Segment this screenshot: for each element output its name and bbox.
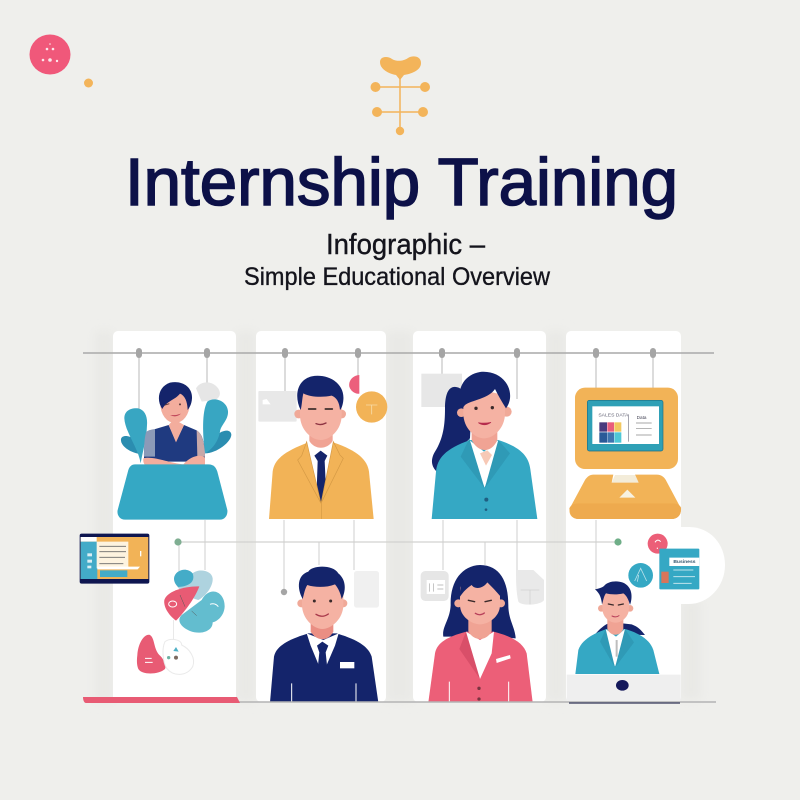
panel: side bubble	[681, 527, 725, 604]
middle hanging rail	[174, 520, 622, 595]
person 6: man in teal jacket at laptop	[567, 534, 699, 702]
monitor screen	[587, 400, 663, 451]
head	[598, 605, 605, 612]
laptop card	[258, 391, 297, 422]
head	[454, 599, 462, 607]
shirt	[469, 440, 498, 488]
tie	[314, 451, 327, 503]
info card: Business	[673, 559, 696, 565]
person 4: man in navy suit	[270, 567, 379, 702]
neck	[472, 428, 497, 450]
laptop base	[567, 675, 681, 702]
pink half circle	[349, 375, 359, 394]
icon: orange branching tree	[370, 56, 430, 135]
head	[160, 384, 190, 423]
note card left	[421, 571, 449, 601]
neck	[607, 618, 623, 635]
panel: column 3	[413, 331, 546, 702]
neck	[311, 620, 333, 639]
note card right	[516, 570, 544, 605]
shirt	[466, 632, 494, 679]
lapels	[298, 442, 321, 503]
panel: column 2	[256, 331, 386, 702]
jacket	[428, 632, 533, 702]
info card	[659, 549, 699, 589]
blob cluster upper	[164, 570, 225, 633]
title: Internship Training	[125, 145, 678, 220]
note card behind person 1	[196, 382, 220, 402]
grey card	[421, 374, 462, 407]
arms	[143, 456, 205, 469]
pink circle icon	[648, 534, 668, 554]
shirt	[606, 629, 625, 667]
screen lines	[627, 414, 629, 442]
computer workstation	[569, 388, 681, 519]
ponytail	[432, 387, 472, 472]
neck	[309, 428, 333, 448]
grey card	[354, 571, 379, 608]
monitor stand	[612, 475, 639, 483]
pocket square	[496, 655, 511, 663]
name badge	[340, 662, 354, 668]
teal circle icon	[628, 563, 653, 588]
monitor frame	[575, 388, 678, 469]
jacket	[269, 442, 374, 519]
hair collar	[595, 622, 645, 635]
panel: column 4	[566, 331, 681, 702]
laptop camera dot	[616, 680, 629, 691]
screen label: Data	[637, 415, 647, 420]
head	[297, 599, 305, 607]
leaves	[121, 399, 231, 463]
lapels	[461, 438, 485, 488]
orange badge	[356, 391, 387, 423]
person 2: man in yellow jacket	[258, 375, 387, 519]
icon: pink badge	[30, 34, 70, 74]
neck	[468, 618, 492, 639]
floating laptop card	[80, 534, 149, 584]
screen text: SALES DATA	[598, 413, 629, 419]
person 5: woman in coral jacket	[421, 565, 544, 702]
blob cluster lower	[137, 620, 194, 674]
head	[457, 408, 466, 417]
subtitle line two: Simple Educational Overview	[244, 263, 551, 291]
panel: column 1	[113, 331, 236, 702]
icon: small orange dot	[84, 78, 93, 88]
shirt	[307, 633, 339, 665]
top hanging rail	[83, 348, 714, 410]
keyboard desk	[570, 475, 681, 519]
shirt	[307, 442, 335, 503]
hair back	[443, 565, 516, 638]
jacket	[270, 633, 378, 702]
tie	[317, 642, 328, 668]
jacket	[575, 629, 659, 674]
person 3: woman in teal jacket	[421, 372, 537, 519]
torso	[144, 425, 205, 462]
subtitle line one: Infographic –	[326, 229, 486, 261]
desk	[117, 464, 227, 520]
colour grid	[599, 422, 621, 443]
head	[294, 410, 303, 418]
jacket	[432, 440, 537, 519]
baseline with pink bar	[83, 697, 716, 703]
triangle button	[619, 490, 635, 498]
lapels	[459, 632, 480, 679]
person 1: seated at desk with leaves	[117, 382, 231, 520]
